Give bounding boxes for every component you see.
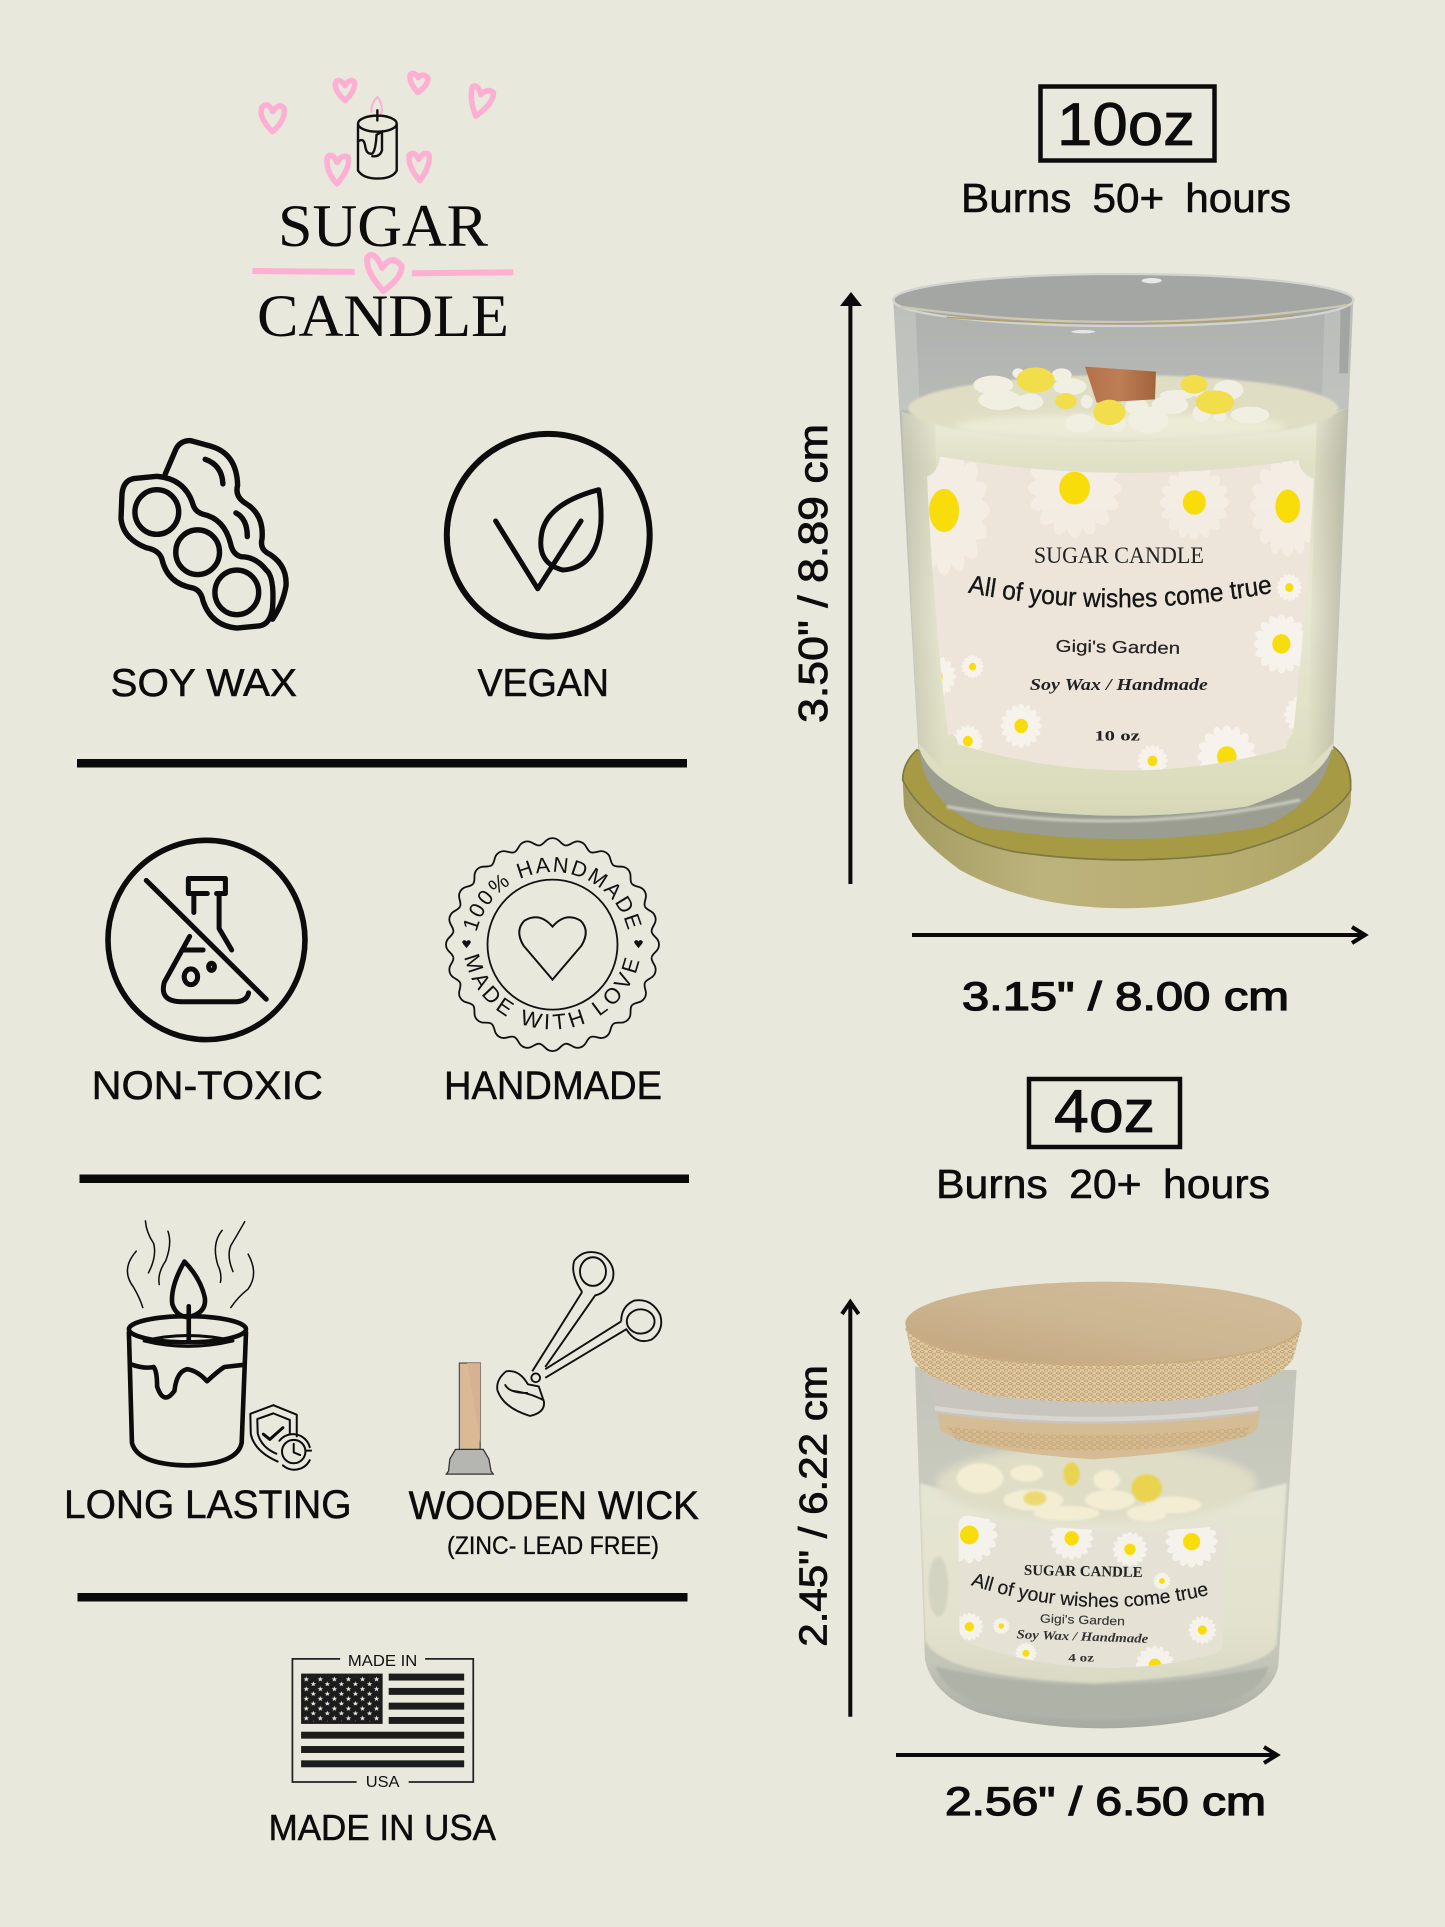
label: handmade: HANDMADE: [444, 1064, 662, 1108]
panel: 10oz size: [790, 84, 1369, 1019]
icon: small candle with flame and hearts: [261, 73, 494, 184]
candle photo: 4oz jar with bamboo lid: Soy Wax / Handmade: [1016, 1627, 1149, 1646]
height label: 3.50" / 8.89 cm: [790, 424, 836, 723]
height label: 2.45" / 6.22 cm: [792, 1365, 836, 1647]
daisy label with text: 10 oz: [1094, 728, 1140, 745]
note: zinc lead free: (ZINC- LEAD FREE): [447, 1532, 659, 1560]
label: wooden wick: WOODEN WICK: [409, 1484, 699, 1528]
burn time: 20+ hours: Burns 20+ hours: [936, 1161, 1270, 1207]
burn time: 50+ hours: Burns 50+ hours: [961, 175, 1291, 221]
icon: wooden wick: [446, 1363, 493, 1474]
heading: SUGAR: SUGAR: [278, 193, 488, 259]
candle photo: 4oz jar with bamboo lid: SUGAR CANDLE: [1024, 1563, 1143, 1581]
label: long lasting: LONG LASTING: [64, 1483, 352, 1527]
feature: handmade: [444, 837, 662, 1108]
panel: 4oz size: [792, 1076, 1302, 1824]
size badge: 4oz: [1029, 1078, 1180, 1147]
heading: CANDLE: CANDLE: [257, 283, 509, 349]
candle photo: 4oz jar with bamboo lid: 4 oz: [1068, 1653, 1094, 1665]
label: non-toxic: NON-TOXIC: [92, 1064, 323, 1108]
candle photo: 4oz jar with bamboo lid: Gigi's Garden: [1040, 1611, 1125, 1628]
daisy label with text: Gigi's Garden: [1055, 637, 1180, 658]
width label: 2.56" / 6.50 cm: [945, 1780, 1266, 1824]
icon: vegan leaf: [447, 434, 650, 637]
candle photo: 10oz jar with daisy label: [892, 273, 1354, 908]
label: made in USA: MADE IN USA: [269, 1807, 496, 1848]
icon: soy wax melt: [121, 441, 286, 628]
feature: soy wax: [110, 441, 297, 705]
icon: burning candle with shield and clock: [127, 1221, 311, 1470]
label: soy wax: SOY WAX: [110, 662, 297, 705]
label: vegan: VEGAN: [478, 662, 609, 705]
size badge: 10oz: [1040, 86, 1214, 160]
icon: crossed-out flask: [108, 840, 305, 1040]
icon: handmade stamp: MADE WITH LOVE: [464, 954, 640, 1030]
width label: 3.15" / 8.00 cm: [962, 975, 1289, 1019]
icon: made in USA flag badge: MADE IN: [348, 1652, 417, 1670]
width arrow: [912, 927, 1365, 943]
icon: handmade stamp: 100% HANDMADE: [464, 857, 642, 931]
daisy label with text: Soy Wax / Handmade: [1030, 675, 1208, 694]
gold base and glass jar with wax: [893, 274, 1353, 908]
daisy label with text: [927, 456, 1314, 770]
feature: non-toxic: [92, 840, 323, 1108]
width arrow: [896, 1747, 1277, 1763]
icon: wick snuffer: [497, 1252, 661, 1416]
size badge: 10oz: 10oz: [1057, 91, 1195, 158]
feature: long lasting: [64, 1221, 352, 1527]
icon: made in USA flag badge: [292, 1652, 473, 1791]
candle photo: 4oz jar with bamboo lid: All of your wishes come true: [970, 1574, 1208, 1608]
icon: handmade stamp: [445, 837, 660, 1052]
icon: made in USA flag badge: USA: [366, 1773, 400, 1791]
daisy label with text: All of your wishes come true: [968, 576, 1271, 608]
feature: wooden wick: [409, 1252, 699, 1560]
candle photo: 4oz jar with bamboo lid: [905, 1282, 1302, 1728]
height arrow: [840, 292, 862, 884]
height arrow: [842, 1302, 859, 1717]
size badge: 4oz: 4oz: [1054, 1078, 1155, 1145]
feature: made in USA: [269, 1652, 496, 1848]
logo: Sugar Candle: [252, 73, 513, 349]
feature: vegan: [447, 434, 650, 705]
daisy label with text: SUGAR CANDLE: [1034, 542, 1204, 568]
heart divider: [252, 255, 513, 291]
